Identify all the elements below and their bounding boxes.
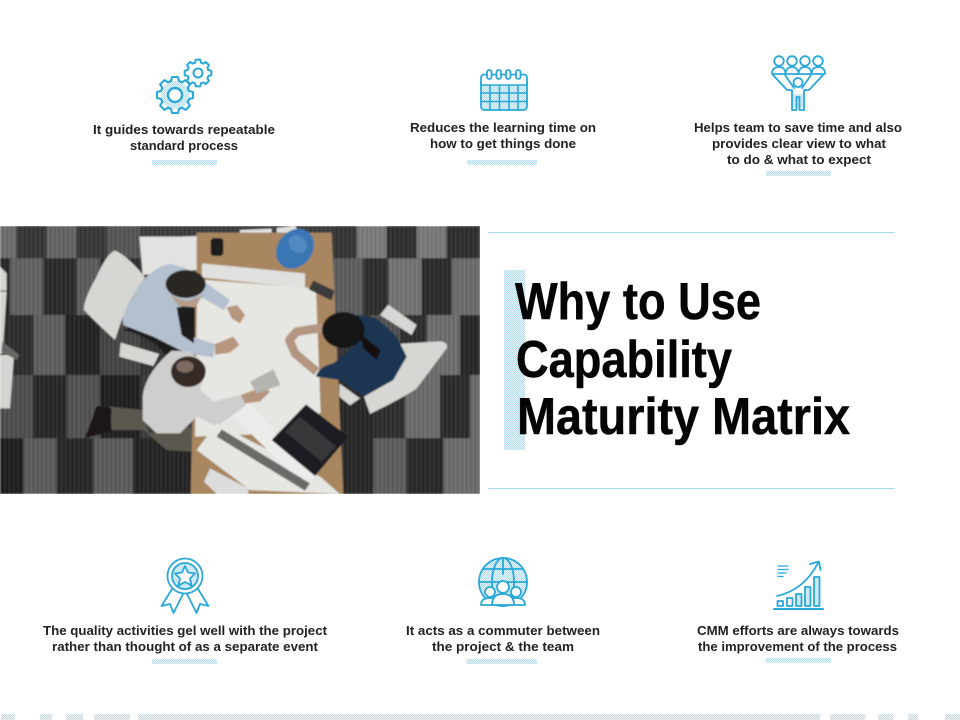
- text: commuter: the project & the team: [432, 640, 574, 654]
- text: commuter: It acts as a commuter between: [406, 624, 600, 638]
- white chairs: [84, 251, 447, 414]
- text: team saves time: to do & what to expect: [727, 153, 872, 167]
- calculator: [250, 369, 281, 393]
- icon: calendar: [481, 70, 527, 110]
- phone: [309, 281, 334, 301]
- panel: quality activities: [43, 558, 328, 664]
- text: quality activities: [43, 624, 328, 654]
- divider lines around title: [488, 232, 895, 488]
- panel: improvement: [697, 562, 899, 663]
- photo: team meeting around a table seen from above: [0, 221, 480, 494]
- left edge furniture: [0, 267, 19, 408]
- woman in navy top: [289, 312, 407, 396]
- dotted accent behind title: [504, 270, 525, 450]
- panel: learning time: [410, 70, 596, 165]
- title: Why to Use: [515, 273, 761, 331]
- title: Maturity Matrix: [517, 388, 850, 446]
- dotted footer strip: [1, 714, 960, 720]
- laptop: [272, 404, 348, 476]
- text: team saves time: Helps team to save time and also: [694, 121, 902, 135]
- mug: [211, 238, 223, 256]
- panel: commuter: [406, 558, 600, 664]
- icon: gears: [157, 60, 211, 113]
- plan rolls and ruler: [196, 424, 340, 494]
- text: commuter: [406, 624, 600, 654]
- text: team saves time: [694, 121, 902, 167]
- carpet floor: [0, 226, 480, 494]
- title: [515, 273, 850, 446]
- icon: award ribbon: [162, 558, 208, 613]
- text: improvement: the improvement of the process: [698, 640, 897, 654]
- icon: globe with people: [479, 558, 527, 606]
- text: quality activities: The quality activities gel well with the project: [43, 624, 328, 638]
- text: quality activities: rather than thought of as a separate event: [52, 640, 319, 654]
- table: [191, 233, 343, 494]
- panel: repeatable process: [93, 60, 275, 165]
- text: improvement: CMM efforts are always towards: [697, 624, 899, 638]
- title: Capability: [516, 331, 732, 389]
- text: improvement: [697, 624, 899, 654]
- text: learning time: [410, 121, 596, 151]
- text: learning time: Reduces the learning time on: [410, 121, 596, 135]
- man in white shirt: [85, 351, 270, 452]
- man with blue shirt: [122, 264, 245, 357]
- papers on floor: [139, 226, 300, 275]
- text: repeatable process: It guides towards repeatable: [93, 123, 275, 137]
- rolled plan: [202, 263, 305, 288]
- text: learning time: how to get things done: [430, 137, 576, 151]
- text: repeatable process: standard process: [130, 139, 238, 153]
- icon: team holding group: [772, 56, 825, 110]
- text: team saves time: provides clear view to what: [712, 137, 887, 151]
- icon: growth bar chart with arrow: [774, 562, 823, 609]
- text: repeatable process: [93, 123, 275, 153]
- blueprint sheet: [195, 279, 321, 437]
- hard hat: [275, 228, 315, 270]
- panel: team saves time: [694, 56, 902, 176]
